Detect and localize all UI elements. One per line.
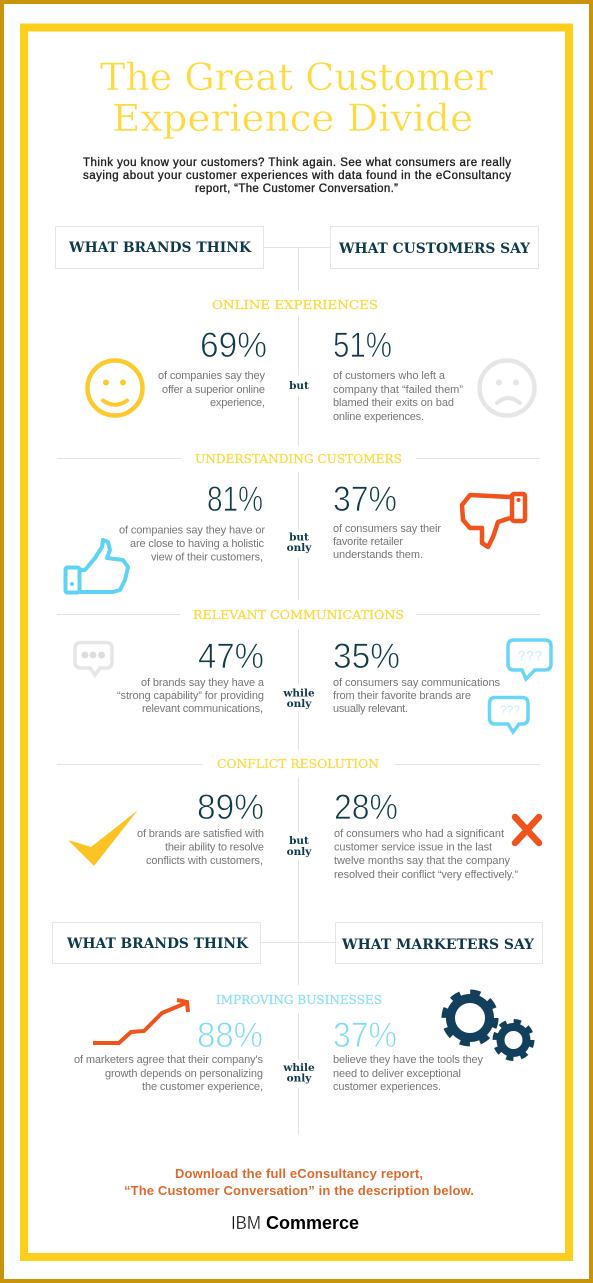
text: holistic view: view of their customers, [151,552,263,564]
connector: while only: only [287,698,312,710]
text: companies: experience, [210,397,265,409]
text: customers: online experiences. [333,411,424,423]
intro text: report, “The Customer Conversation.” [195,183,398,195]
call to action: “The Customer Conversation” in the description below. [124,1183,474,1198]
icon: thumbs up [66,540,128,592]
icon: large blue speech bubble [508,640,551,679]
connector: but only: only [287,846,312,858]
header box: what marketers say: WHAT MARKETERS SAY [341,937,535,953]
header box: what customers say: WHAT CUSTOMERS SAY [338,241,531,257]
intro text: Think you know your customers? Think again. See what consumers are really [83,157,511,169]
text: retailer [333,523,441,561]
title [100,56,493,140]
icon: grey speech bubble [75,642,112,675]
text: brands satisfied: their ability to resolve [165,842,264,854]
connector: but only [287,532,312,554]
heading: understanding customers: UNDERSTANDING CUSTOMERS [195,451,402,466]
icon: smiley [88,360,142,416]
logo: IBM Commerce: Commerce [266,1213,359,1233]
text: retailer: understands them. [333,549,423,561]
title: Experience Divide [112,97,473,140]
header box: what brands think 2 [52,922,260,964]
panel: understanding customers [66,451,525,592]
icon: cross [515,817,539,843]
text: companies [158,370,266,409]
text: tools [333,1054,484,1093]
text: tools: believe they have the tools they [333,1054,484,1066]
text: consumers relevant: usually relevant. [333,703,408,715]
stat: 37%: 37% [333,480,397,519]
text: retailer: of consumers say their [333,523,441,535]
header box: what brands think 2: WHAT BRANDS THINK [66,936,249,952]
call to action: Download the full eConsultancy report, [175,1166,423,1181]
text: brands satisfied: conflicts with customers, [146,855,263,867]
heading: improving businesses: IMPROVING BUSINESSES [216,992,382,1007]
stat: 69%: 69% [200,326,267,365]
connector: while only [282,688,315,710]
stat: 51%: 51% [333,326,392,365]
text: tools: customer experiences. [333,1081,441,1093]
text: consumers conflict: twelve months say that the company [334,855,510,867]
heading: relevant communications: RELEVANT COMMUNICATIONS [193,607,404,622]
text: companies: offer a superior online [162,384,265,396]
panel: relevant communications [75,607,551,732]
text: holistic view: are close to having a holistic [130,538,264,550]
text: customers [333,370,463,423]
text: retailer: favorite retailer [333,536,403,548]
text: marketers agree: of marketers agree that their company's [74,1054,264,1066]
heading: online experiences: ONLINE EXPERIENCES [212,297,378,312]
text: holistic view: of companies say they have or [119,524,265,536]
text: consumers relevant [333,677,500,715]
text: marketers agree [74,1054,264,1093]
text: consumers conflict: of consumers who had a significant [334,828,504,840]
stat: 88%: 88% [197,1016,263,1055]
connector: but: but [289,380,309,392]
icon: small blue speech bubble [490,698,528,732]
header box: what customers say [330,226,538,268]
logo: IBM Commerce: IBM [231,1213,261,1233]
text: consumers relevant: from their favorite brands are [333,690,471,702]
header box: what marketers say [336,922,542,964]
connector: while only: only [287,1072,312,1084]
connector: while only [282,1062,315,1084]
stat: 37%: 37% [333,1016,397,1055]
text: customers: of customers who left a [333,370,446,382]
icon: thumbs down [462,494,525,547]
connector: while only: while [282,688,315,700]
text: marketers agree: the customer experience, [142,1081,263,1093]
icon: large blue speech bubble: ??? [518,648,542,663]
heading: conflict resolution: CONFLICT RESOLUTION [217,756,379,771]
icon: growth arrow [93,1000,188,1043]
text: brands satisfied [137,828,264,867]
text: brands capability: of brands say they have a [141,677,265,689]
text: brands satisfied: of brands are satisfied with [137,828,264,840]
text: brands capability: relevant communications, [142,703,263,715]
text: customers: blamed their exits on bad [333,397,454,409]
stat: 28%: 28% [334,788,398,827]
intro text [83,157,511,195]
icon: frowny [480,360,534,416]
stat: 81%: 81% [207,480,263,519]
text: consumers conflict: customer service issue in the last [334,842,492,854]
panel: improving businesses [74,992,532,1093]
connector: while only: while [282,1062,315,1074]
text: customers: company that “failed them” [333,384,463,396]
connector: but only: but [289,532,309,544]
text: consumers conflict [334,828,518,881]
connector: but only: but [289,835,309,847]
text: brands capability: “strong capability” for providing [117,690,264,702]
connector: but only [287,835,312,858]
stat: 47%: 47% [198,637,264,676]
panel: online experiences [88,297,534,423]
icon: gears [444,992,532,1058]
panel: conflict resolution [68,756,539,881]
title: The Great Customer [100,56,493,99]
text: brands capability [117,677,265,715]
text: consumers relevant: of consumers say communications [333,677,500,689]
stat: 89%: 89% [197,788,264,827]
icon: check mark [68,810,138,866]
call to action [124,1166,474,1198]
intro text: saying about your customer experiences with data found in the eConsultancy [83,170,511,182]
header box: what brands think [56,226,264,268]
text: tools: need to deliver exceptional [333,1068,461,1080]
header box: what brands think: WHAT BRANDS THINK [68,240,252,256]
stat: 35%: 35% [333,637,400,676]
connector: but only: only [287,542,312,554]
icon: small blue speech bubble: ??? [500,703,520,717]
text: holistic view [119,524,265,564]
text: companies: of companies say they [158,370,266,382]
text: consumers conflict: resolved their conflict “very effectively.” [334,869,518,881]
text: marketers agree: growth depends on personalizing [105,1068,263,1080]
